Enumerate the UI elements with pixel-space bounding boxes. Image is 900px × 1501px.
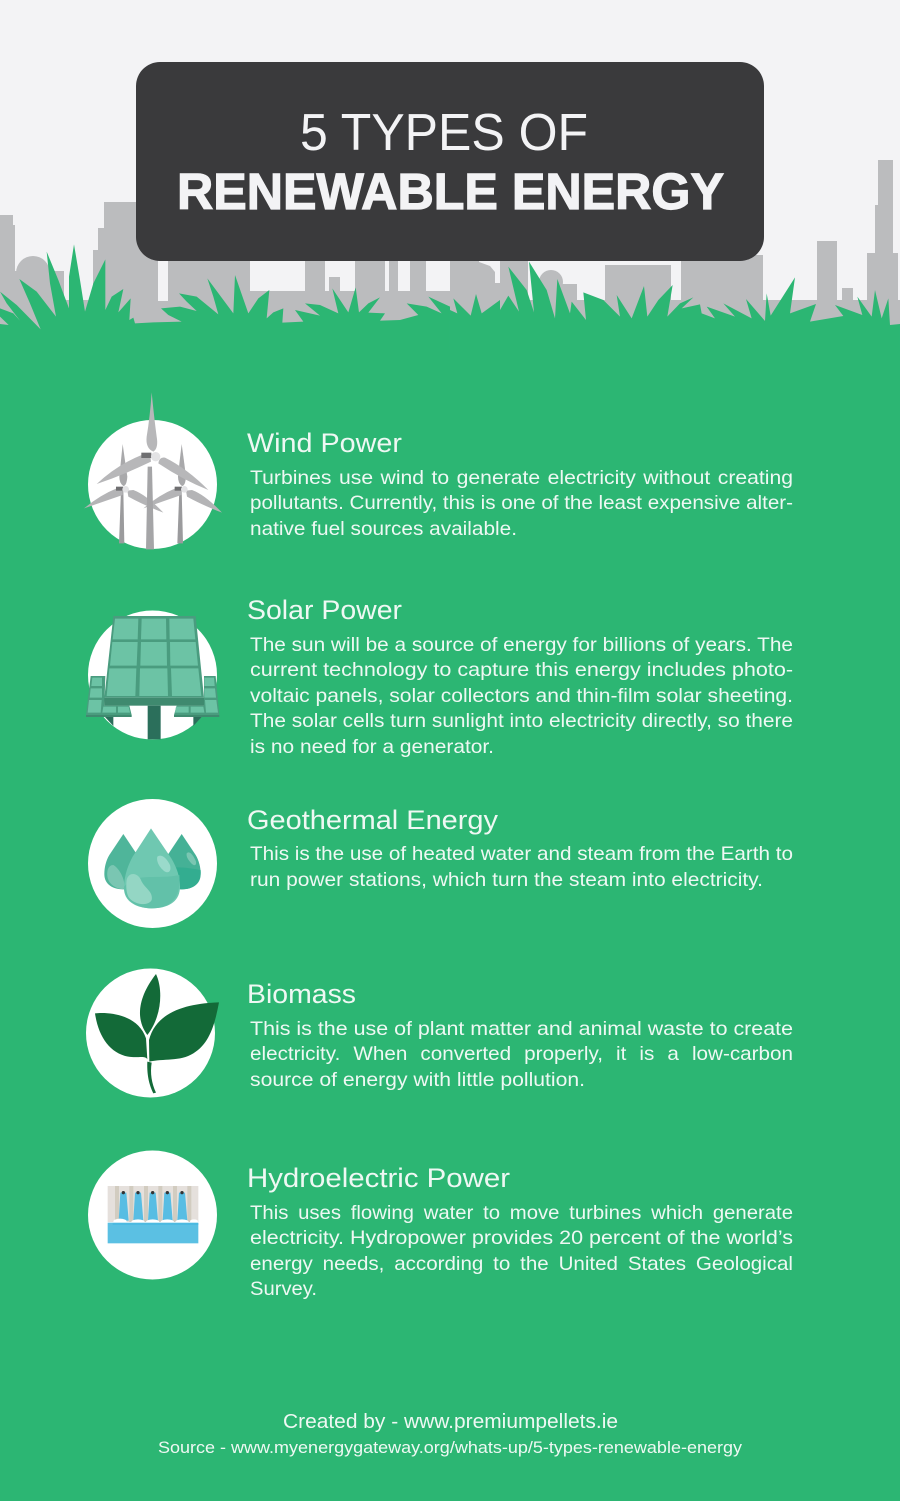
source line: Source - www.myenergygateway.org/whats-up/5-types-renewable-energy <box>158 1438 743 1457</box>
text: solar power description: The solar cells turn sunlight into electricity directly, so there <box>250 710 793 732</box>
heading: solar power: Solar Power <box>247 595 402 625</box>
panel: hydroelectric power <box>88 1150 793 1300</box>
text: solar power description: The sun will be a source of energy for billions of years. The <box>250 634 793 656</box>
text: hydroelectric description: Survey. <box>250 1278 317 1300</box>
text: hydroelectric description <box>250 1202 793 1300</box>
text: biomass description: This is the use of plant matter and animal waste to create <box>250 1018 793 1040</box>
heading: geothermal energy: Geothermal Energy <box>247 805 499 835</box>
text: geothermal description <box>250 843 793 891</box>
text: biomass description <box>250 1018 793 1091</box>
text: solar power description <box>250 634 793 758</box>
text: geothermal description: run power stations, which turn the steam into electricity. <box>250 869 763 891</box>
icon: wind turbines <box>84 392 222 549</box>
text: solar power description: voltaic panels, solar collectors and thin-film solar sheeting. <box>250 685 793 707</box>
title line one: 5 TYPES OF <box>300 104 588 162</box>
text: wind power description <box>250 467 793 540</box>
heading: biomass: Biomass <box>247 979 356 1009</box>
text: biomass description: source of energy with little pollution. <box>250 1069 585 1091</box>
panel: wind power <box>84 392 793 549</box>
icon: leaves <box>86 968 219 1098</box>
footer credits <box>158 1411 743 1457</box>
panel: geothermal energy <box>88 799 793 928</box>
text: solar power description: is no need for a generator. <box>250 736 494 758</box>
title line two: RENEWABLE ENERGY <box>177 163 724 220</box>
icon: water drops <box>88 799 217 928</box>
text: wind power description: native fuel sources available. <box>250 518 517 540</box>
text: hydroelectric description: This uses flowing water to move turbines which generate <box>250 1202 793 1224</box>
text: hydroelectric description: energy needs, according to the United States Geological <box>250 1253 793 1275</box>
city skyline <box>0 160 900 340</box>
icon: solar panels <box>86 610 219 740</box>
panel: biomass <box>86 968 793 1098</box>
title panel <box>136 62 764 261</box>
title <box>136 62 764 261</box>
panel: solar power <box>86 595 793 758</box>
text: hydroelectric description: electricity. Hydropower provides 20 percent of the world’s <box>250 1227 793 1249</box>
text: solar power description: current technology to capture this energy includes photo- <box>250 659 793 681</box>
heading: wind power: Wind Power <box>247 428 402 458</box>
text: biomass description: electricity. When converted properly, it is a low-carbon <box>250 1043 793 1065</box>
text: wind power description: Turbines use wind to generate electricity without creating <box>250 467 793 489</box>
heading: hydroelectric power: Hydroelectric Power <box>247 1163 510 1193</box>
created by line: Created by - www.premiumpellets.ie <box>283 1411 618 1433</box>
text: wind power description: pollutants. Currently, this is one of the least expensive alter- <box>250 492 793 514</box>
icon: hydroelectric dam <box>88 1150 217 1280</box>
text: geothermal description: This is the use of heated water and steam from the Earth to <box>250 843 793 865</box>
